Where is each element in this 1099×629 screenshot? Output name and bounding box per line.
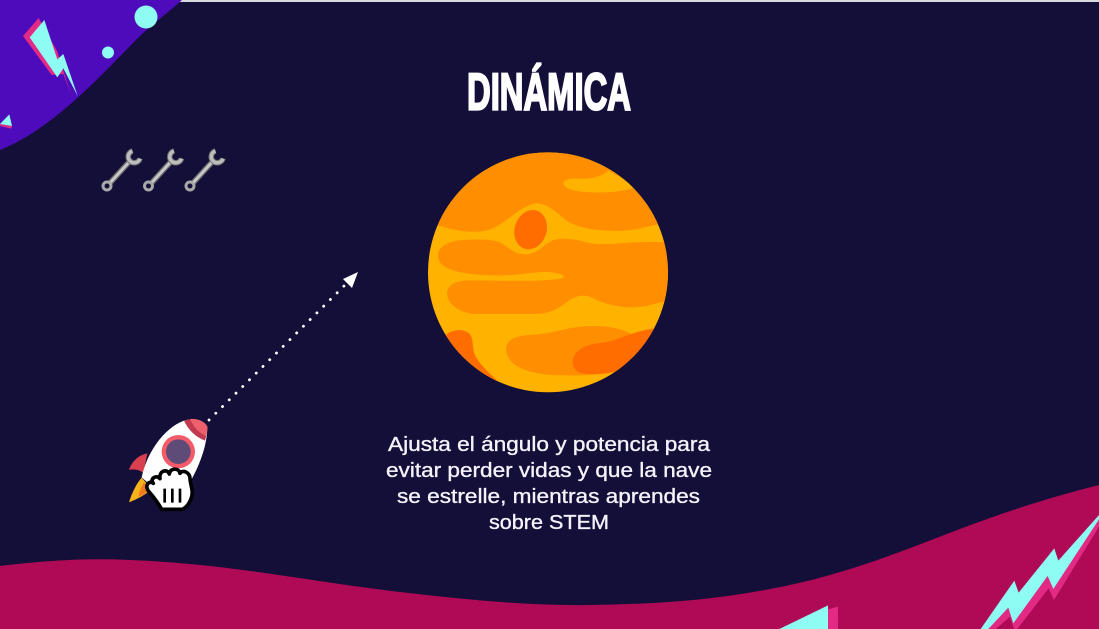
icon: small circle — [102, 46, 114, 58]
icon: wrench 2 — [144, 151, 182, 190]
bottom magenta wave with decorations — [0, 485, 1099, 629]
fin — [129, 453, 147, 473]
text block: description: se estrelle, mientras aprendes — [397, 486, 700, 508]
icon: wrench 1 — [103, 151, 140, 190]
text block: description — [386, 434, 712, 534]
icon: wrenches (lives) — [103, 151, 223, 190]
text block: description: Ajusta el ángulo y potencia para — [388, 434, 711, 456]
flame — [129, 478, 152, 502]
arrow: dotted trajectory — [209, 272, 358, 420]
icon: wrench 3 — [186, 151, 223, 190]
nose cap — [184, 419, 207, 441]
icon: bottom-right lightning bolt — [981, 515, 1099, 629]
body — [142, 419, 207, 493]
icon: hand cursor — [147, 469, 192, 509]
icon: top-left lightning bolt — [23, 18, 78, 96]
icon: planet — [420, 145, 673, 392]
text block: description: sobre STEM — [489, 512, 609, 534]
title: DINÁMICA — [467, 62, 631, 120]
window — [162, 435, 195, 468]
text block: description: evitar perder vidas y que la nave — [386, 460, 712, 482]
icon: bottom triangle — [779, 605, 838, 629]
top-left purple corner with decorations — [0, 0, 182, 150]
icon: large circle — [134, 6, 158, 28]
icon: small triangle — [0, 114, 12, 129]
icon: rocket — [129, 419, 207, 502]
